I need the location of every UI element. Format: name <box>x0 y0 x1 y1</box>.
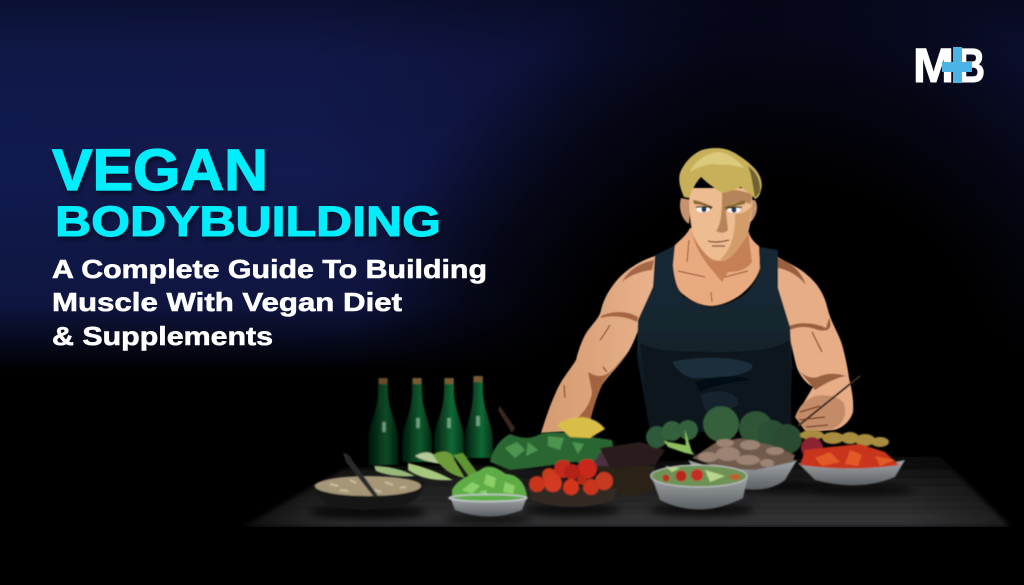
right arm <box>776 256 853 432</box>
title: vegan: VEGAN <box>52 138 268 203</box>
potatoes <box>800 430 889 447</box>
hair dark side <box>748 166 760 198</box>
subtitle: & Supplements <box>52 321 273 351</box>
logo MHB: B <box>958 40 985 93</box>
left arm <box>541 256 656 433</box>
tomato bowl <box>528 459 617 507</box>
eyebrows <box>693 200 745 210</box>
dark berries <box>600 442 665 468</box>
right arm shadows <box>778 258 846 390</box>
cheek shading <box>720 205 752 260</box>
pepper bowl <box>798 437 905 485</box>
hand and fork <box>795 376 860 431</box>
yellow salad <box>557 417 605 438</box>
meat bowl <box>688 438 797 490</box>
table shadows <box>310 482 915 523</box>
man in black tank top <box>541 148 860 433</box>
eyes <box>696 207 742 213</box>
chest and neck <box>672 228 760 306</box>
subtitle: A Complete Guide To Building <box>52 254 487 284</box>
broccoli <box>646 406 802 455</box>
left arm shadows <box>565 260 654 430</box>
salad bowl <box>651 465 748 510</box>
rice bowl <box>313 453 425 510</box>
green bottles <box>368 376 493 465</box>
food on the table <box>310 376 915 523</box>
arm muscle lines <box>564 325 822 398</box>
lettuce bowl <box>449 467 527 516</box>
sliced cucumbers <box>374 452 477 480</box>
ears <box>680 198 757 224</box>
collarbone lines <box>678 240 748 302</box>
neck shadow <box>692 232 752 282</box>
logo MHB: M <box>913 40 954 93</box>
tank top <box>637 245 792 432</box>
hair <box>679 148 762 199</box>
table top <box>200 455 1024 537</box>
tank top folds <box>640 340 792 432</box>
mixed greens <box>490 406 620 470</box>
title: bodybuilding: BODYBUILDING <box>55 198 441 246</box>
hair highlight <box>690 152 744 172</box>
nose and forehead shadow <box>716 190 752 233</box>
face <box>689 188 752 260</box>
subtitle: Muscle With Vegan Diet <box>52 287 402 317</box>
mouth <box>708 240 729 246</box>
logo MHB <box>913 40 985 93</box>
brown dish <box>596 466 655 496</box>
subtitle <box>52 254 487 351</box>
